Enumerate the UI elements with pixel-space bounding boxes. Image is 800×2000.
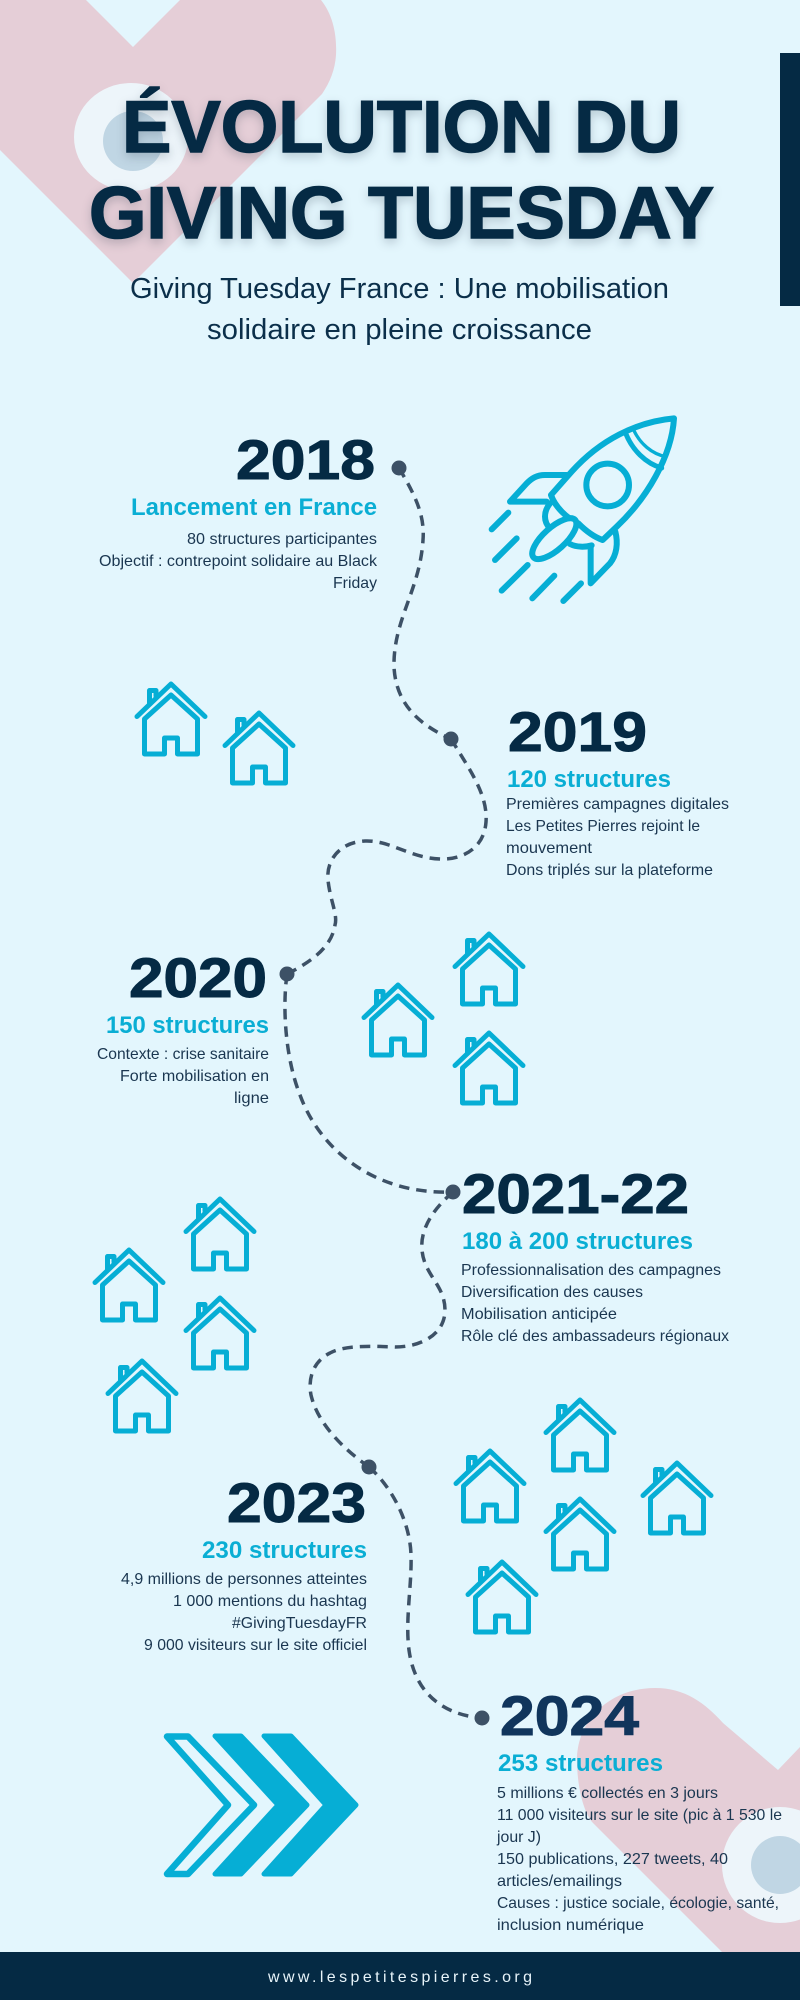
accent bar: right edge	[780, 53, 800, 306]
text: 2023 details: #GivingTuesdayFR	[232, 1615, 367, 1632]
text: 2023 details: 1 000 mentions du hashtag	[173, 1593, 367, 1610]
text: 2018 details: Friday	[333, 575, 377, 592]
panel: 2024	[496, 1684, 782, 1934]
text: 2021-22 details: Rôle clé des ambassadeurs régionaux	[461, 1328, 729, 1345]
year 2021-22: 2021-22	[462, 1162, 689, 1225]
year 2023: 2023	[227, 1471, 366, 1534]
background heart: top left	[0, 0, 336, 283]
text: 2020 details: Contexte : crise sanitaire	[97, 1046, 269, 1063]
heading: 120 structures: 120 structures	[507, 766, 671, 793]
subtitle: Giving Tuesday France : Une mobilisation	[130, 273, 669, 305]
text: 2024 details: 11 000 visiteurs sur le site (pic à 1 530 le	[497, 1807, 782, 1824]
text: 2019 details	[506, 796, 729, 879]
heading: 230 structures: 230 structures	[202, 1537, 367, 1564]
text: 2018 details: Objectif : contrepoint solidaire au Black	[99, 553, 378, 570]
panel: 2021-22	[461, 1162, 729, 1345]
text: 2019 details: Dons triplés sur la plateforme	[506, 862, 713, 879]
text: 2024 details: 150 publications, 227 tweets, 40	[497, 1851, 728, 1868]
text: 2023 details	[121, 1571, 367, 1654]
icon: house group 2021-22	[95, 1199, 254, 1431]
text: 2021-22 details: Diversification des causes	[461, 1284, 643, 1301]
text: 2024 details: jour J)	[496, 1829, 541, 1846]
heading: lancement: Lancement en France	[131, 494, 377, 521]
year 2019: 2019	[508, 700, 647, 763]
dashed timeline path	[285, 468, 486, 1718]
title: ÉVOLUTION DU	[122, 87, 681, 168]
text: 2021-22 details: Mobilisation anticipée	[461, 1306, 617, 1323]
year 2018: 2018	[236, 428, 375, 491]
panel: 2023	[121, 1471, 367, 1654]
text: 2024 details	[496, 1785, 782, 1934]
icon: rocket	[492, 418, 674, 601]
text: 2024 details: inclusion numérique	[497, 1917, 644, 1934]
text: 2023 details: 4,9 millions de personnes atteintes	[121, 1571, 367, 1588]
subtitle: solidaire en pleine croissance	[207, 314, 592, 346]
text: 2019 details: Premières campagnes digitales	[506, 796, 729, 813]
panel: 2019	[506, 700, 729, 879]
title: GIVING TUESDAY	[89, 173, 714, 254]
text: 2024 details: 5 millions € collectés en 3 jours	[497, 1785, 718, 1802]
text: 2020 details: Forte mobilisation en	[120, 1068, 269, 1085]
text: 2020 details	[97, 1046, 269, 1107]
icon: house group 2020	[364, 934, 523, 1103]
panel: 2018	[99, 428, 378, 592]
year 2020: 2020	[129, 946, 267, 1009]
heading: 150 structures: 150 structures	[106, 1012, 269, 1039]
year 2024: 2024	[500, 1684, 639, 1747]
text: 2018 details: 80 structures participantes	[187, 531, 377, 548]
text: 2021-22 details	[461, 1262, 729, 1345]
panel: 2020	[97, 946, 269, 1107]
text: 2023 details: 9 000 visiteurs sur le site officiel	[144, 1637, 367, 1654]
footer	[0, 1952, 800, 2000]
subtitle	[130, 273, 669, 346]
text: 2024 details: Causes : justice sociale, écologie, santé,	[497, 1895, 779, 1912]
icon: house group 2018	[137, 684, 293, 783]
text: 2019 details: mouvement	[506, 840, 593, 857]
icon: chevrons arrow	[167, 1736, 356, 1874]
text: 2019 details: Les Petites Pierres rejoint le	[506, 818, 700, 835]
timeline dots	[280, 460, 490, 1726]
heading: 253 structures: 253 structures	[498, 1750, 663, 1777]
text: 2020 details: ligne	[234, 1090, 269, 1107]
text: 2018 details	[99, 531, 378, 592]
footer url: www.lespetitespierres.org	[267, 1969, 532, 1986]
text: 2021-22 details: Professionnalisation des campagnes	[461, 1262, 721, 1279]
heading: 180 à 200 structures: 180 à 200 structures	[462, 1228, 693, 1255]
icon: house group 2023	[456, 1400, 711, 1632]
background heart: bottom right	[577, 1688, 800, 1952]
title	[89, 87, 714, 254]
text: 2024 details: articles/emailings	[497, 1873, 622, 1890]
